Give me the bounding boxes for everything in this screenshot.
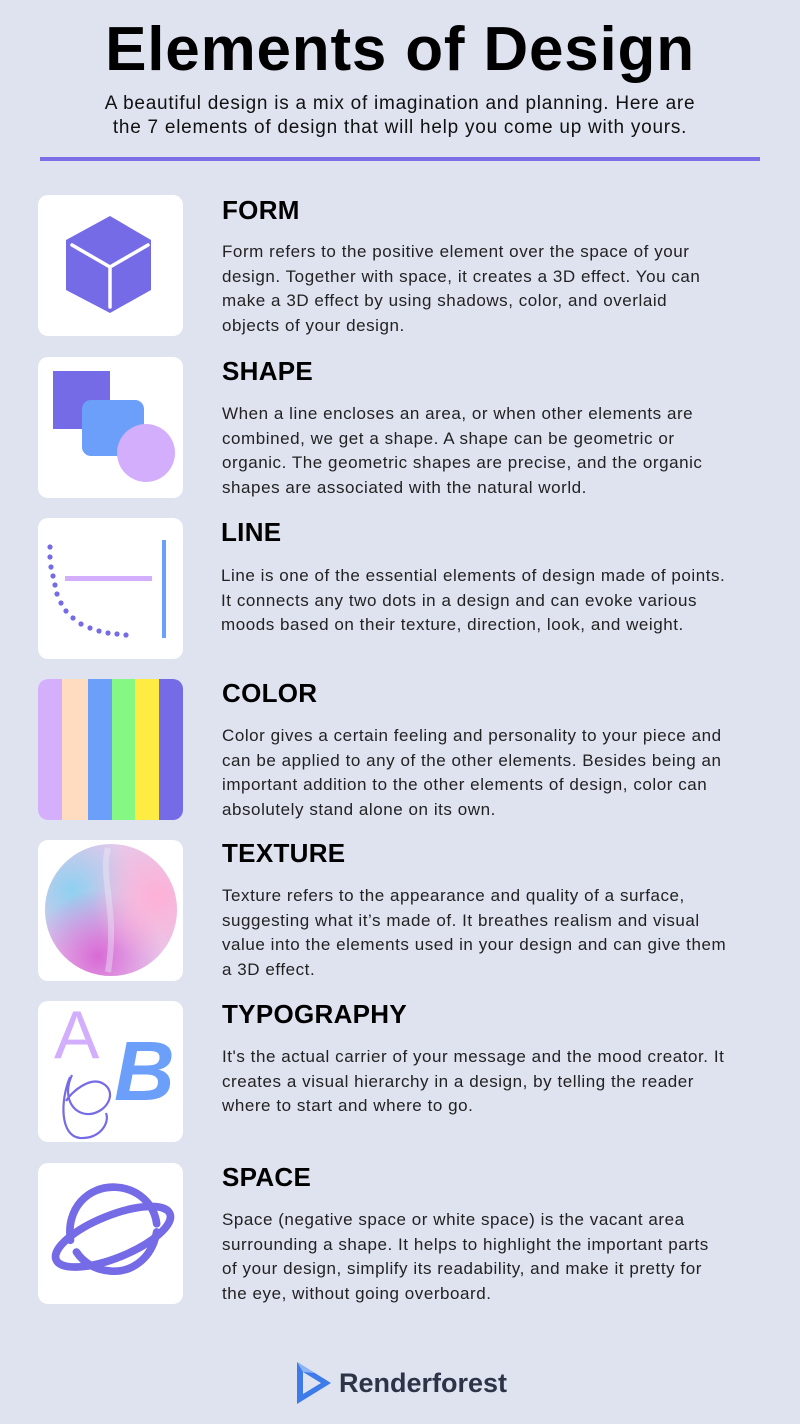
text: space: surrounding a shape. It helps to highlight the important parts bbox=[222, 1234, 709, 1254]
text: color: absolutely stand alone on its own. bbox=[222, 800, 496, 818]
text: texture bbox=[222, 886, 726, 978]
text: space bbox=[222, 1210, 709, 1302]
text: line: Line is one of the essential elements of design made of points. bbox=[221, 566, 725, 585]
icon: line bbox=[38, 518, 183, 659]
icon: typography bbox=[38, 1001, 183, 1142]
text: texture: Texture refers to the appearance and quality of a surface, bbox=[222, 886, 685, 905]
text: typography: creates a visual hierarchy in a design, by telling the reader bbox=[222, 1072, 694, 1090]
text: form bbox=[222, 242, 700, 334]
heading: space: SPACE bbox=[222, 1162, 311, 1192]
icon: typography: B bbox=[114, 1024, 175, 1118]
text: color: important addition to the other elements of design, color can bbox=[222, 775, 707, 794]
icon: form cube bbox=[38, 195, 183, 336]
text: texture: a 3D effect. bbox=[222, 960, 315, 978]
icon: space planet bbox=[38, 1163, 183, 1304]
subtitle: the 7 elements of design that will help you come up with yours. bbox=[113, 116, 687, 138]
text: form: design. Together with space, it creates a 3D effect. You can bbox=[222, 266, 700, 286]
text: texture: value into the elements used in your design and can give them bbox=[222, 935, 726, 954]
text: shape: organic. The geometric shapes are precise, and the organic bbox=[222, 453, 702, 472]
icon: color stripes bbox=[38, 679, 183, 820]
title: Elements of Design bbox=[105, 15, 695, 84]
heading: form: FORM bbox=[222, 195, 300, 225]
text: form: make a 3D effect by using shadows, color, and overlaid bbox=[222, 291, 667, 310]
text: shape: shapes are associated with the natural world. bbox=[222, 478, 587, 496]
text: shape: When a line encloses an area, or when other elements are bbox=[222, 404, 693, 423]
heading: color: COLOR bbox=[222, 678, 317, 708]
text: typography: where to start and where to go. bbox=[222, 1096, 473, 1115]
text: color: can be applied to any of the other elements. Besides being an bbox=[222, 750, 721, 770]
text: color bbox=[222, 726, 722, 818]
text: line bbox=[221, 566, 725, 634]
text: space: the eye, without going overboard. bbox=[222, 1284, 492, 1302]
text: space: Space (negative space or white space) is the vacant area bbox=[222, 1210, 685, 1229]
logo: Renderforest: Renderforest bbox=[339, 1368, 507, 1398]
heading: shape: SHAPE bbox=[222, 356, 313, 386]
heading: typography: TYPOGRAPHY bbox=[222, 999, 407, 1029]
text: shape: combined, we get a shape. A shape can be geometric or bbox=[222, 428, 675, 448]
text: form: Form refers to the positive element over the space of your bbox=[222, 242, 690, 261]
text: color: Color gives a certain feeling and personality to your piece and bbox=[222, 726, 722, 745]
logo: Renderforest bbox=[297, 1362, 507, 1404]
heading: texture: TEXTURE bbox=[222, 838, 345, 868]
text: line: moods based on their texture, direction, look, and weight. bbox=[221, 615, 684, 634]
text: typography bbox=[222, 1047, 724, 1115]
text: line: It connects any two dots in a design and can evoke various bbox=[221, 590, 697, 610]
icon: texture bbox=[38, 840, 183, 981]
text: space: of your design, simplify its readability, and make it pretty for bbox=[222, 1259, 702, 1278]
text: typography: It's the actual carrier of your message and the mood creator. It bbox=[222, 1047, 724, 1066]
heading: line: LINE bbox=[221, 517, 281, 547]
icon: shape bbox=[38, 357, 183, 498]
text: form: objects of your design. bbox=[222, 316, 405, 334]
text: texture: suggesting what it’s made of. It breathes realism and visual bbox=[222, 910, 700, 930]
text: shape bbox=[222, 404, 702, 496]
subtitle: A beautiful design is a mix of imagination and planning. Here are bbox=[105, 93, 695, 114]
subtitle bbox=[104, 93, 695, 138]
